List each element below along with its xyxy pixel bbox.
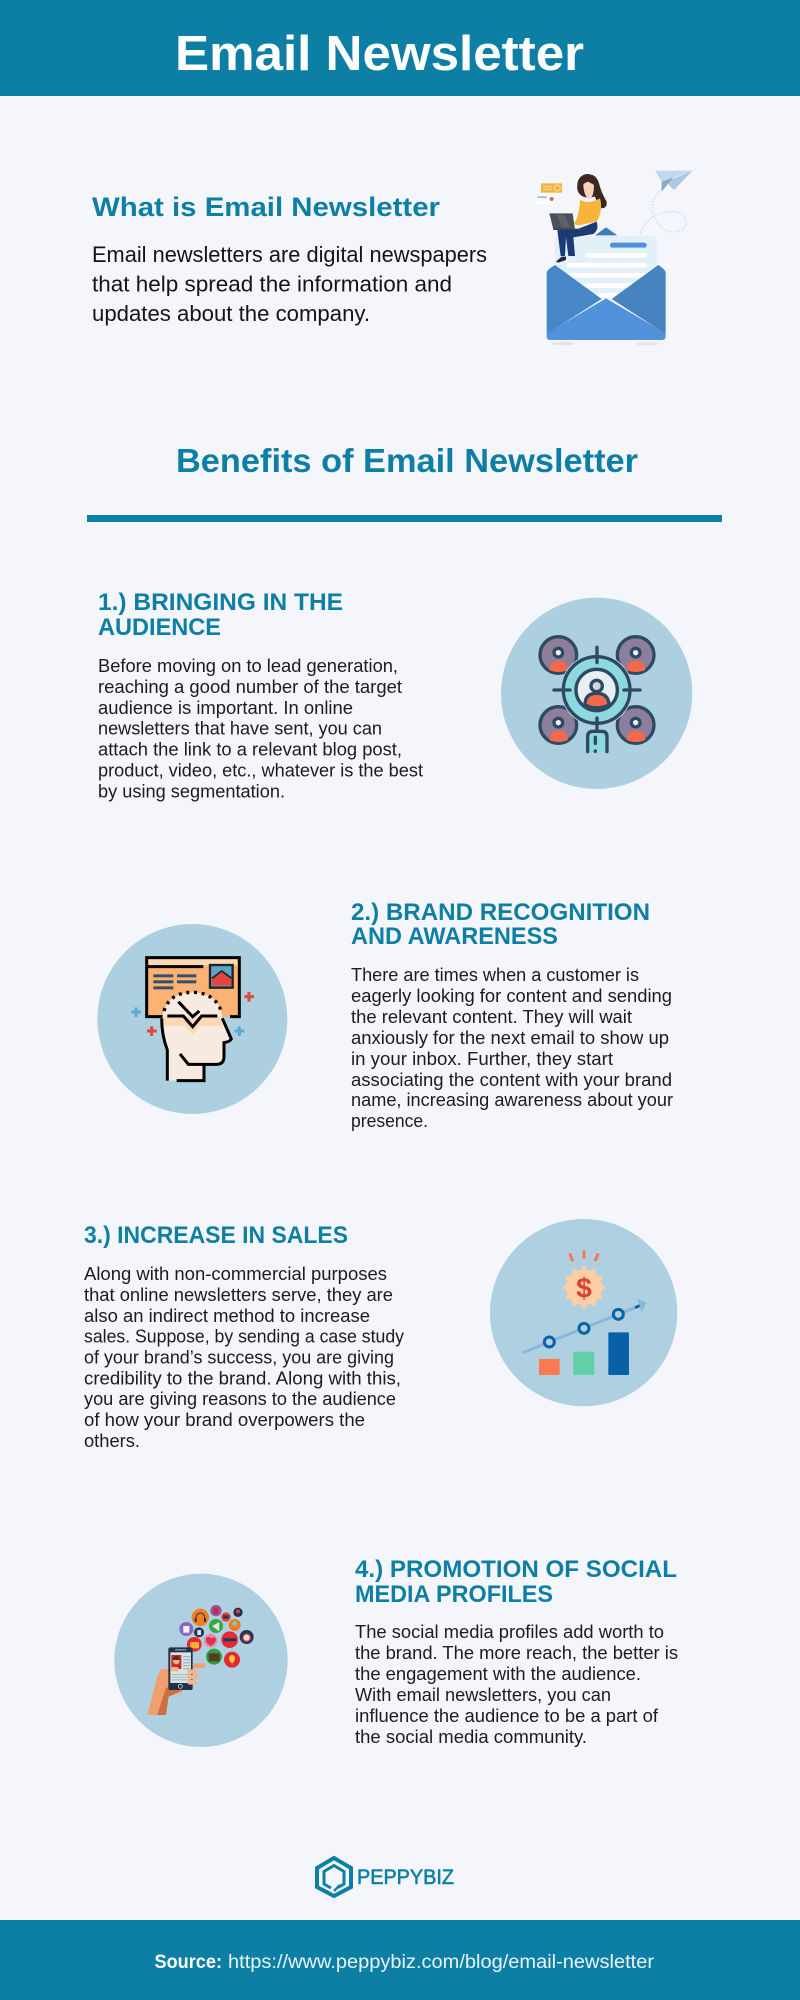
benefit 4 text: The social media profiles add worth to bbox=[355, 1621, 664, 1642]
benefit 1 heading: 1.) BRINGING IN THE bbox=[98, 589, 343, 616]
benefit 1 text: attach the link to a relevant blog post, bbox=[98, 738, 402, 760]
benefit 2 text: associating the content with your brand bbox=[351, 1069, 672, 1090]
benefit 4 text: the social media community. bbox=[355, 1726, 587, 1747]
benefit 4 heading: 4.) PROMOTION OF SOCIAL bbox=[355, 1556, 677, 1583]
benefit 1 text bbox=[98, 655, 424, 802]
title: Email Newsletter bbox=[175, 27, 584, 81]
icon: phone with social media bubbles bbox=[114, 1574, 288, 1747]
benefit 2 text: presence. bbox=[351, 1110, 428, 1131]
benefit 2 text: anxiously for the next email to show up bbox=[351, 1027, 669, 1048]
benefit 1 text: by using segmentation. bbox=[98, 780, 285, 802]
benefit 4 text bbox=[355, 1621, 678, 1747]
intro paragraph bbox=[92, 242, 487, 326]
benefit 2 text: the relevant content. They will wait bbox=[351, 1006, 633, 1027]
benefit 1 heading: AUDIENCE bbox=[98, 614, 221, 641]
benefit 4 text: influence the audience to be a part of bbox=[355, 1705, 659, 1726]
benefit 3 heading: 3.) INCREASE IN SALES bbox=[84, 1222, 348, 1249]
intro heading: What is Email Newsletter bbox=[92, 192, 441, 222]
panel: benefit 4 bbox=[355, 1556, 678, 1747]
benefit 1 text: product, video, etc., whatever is the best bbox=[98, 760, 424, 780]
benefit 4 heading bbox=[355, 1556, 677, 1608]
benefit 2 heading bbox=[351, 899, 650, 950]
benefit 3 text: sales. Suppose, by sending a case study bbox=[84, 1326, 405, 1346]
panel: benefit 1 bbox=[98, 589, 424, 802]
benefit 3 text: that online newsletters serve, they are bbox=[84, 1284, 393, 1305]
header banner with title bbox=[0, 0, 800, 96]
intro paragraph: Email newsletters are digital newspapers bbox=[92, 242, 487, 267]
logo hexagon mark bbox=[317, 1858, 351, 1896]
footer bar with source bbox=[0, 1920, 800, 2000]
logo wordmark: PEPPYBIZ bbox=[357, 1866, 454, 1889]
benefit 3 text: others. bbox=[84, 1430, 140, 1451]
benefit 3 text: of how your brand overpowers the bbox=[84, 1409, 365, 1430]
benefit 4 text: the engagement with the audience. bbox=[355, 1663, 641, 1684]
benefit 1 heading bbox=[98, 589, 343, 641]
panel: what is email newsletter bbox=[92, 192, 487, 326]
benefit 2 text: name, increasing awareness about your bbox=[351, 1089, 673, 1110]
benefit 3 text: Along with non-commercial purposes bbox=[84, 1263, 387, 1284]
benefit 2 text: in your inbox. Further, they start bbox=[351, 1048, 614, 1069]
illustration: woman with laptop sitting on open envelope bbox=[536, 171, 693, 345]
icon: sales growth chart bbox=[490, 1219, 677, 1406]
panel: benefit 3 bbox=[84, 1222, 405, 1451]
benefit 4 heading: MEDIA PROFILES bbox=[355, 1581, 553, 1608]
benefit 4 text: With email newsletters, you can bbox=[355, 1684, 611, 1705]
intro paragraph: updates about the company. bbox=[92, 301, 370, 326]
benefit 2 text: eagerly looking for content and sending bbox=[351, 985, 672, 1006]
benefit 1 text: audience is important. In online bbox=[98, 697, 353, 718]
benefit 3 text: credibility to the brand. Along with this, bbox=[84, 1368, 401, 1388]
panel: benefit 2 bbox=[351, 899, 673, 1131]
section heading: benefits: Benefits of Email Newsletter bbox=[176, 442, 638, 479]
benefit 2 heading: AND AWARENESS bbox=[351, 923, 558, 950]
benefit 2 heading: 2.) BRAND RECOGNITION bbox=[351, 899, 650, 926]
benefit 3 text: also an indirect method to increase bbox=[84, 1305, 370, 1326]
benefit 2 text: There are times when a customer is bbox=[351, 964, 639, 985]
logo: PeppyBiz bbox=[317, 1858, 454, 1896]
icon: sales growth chart: $ bbox=[576, 1272, 592, 1303]
benefit 2 text bbox=[351, 964, 673, 1131]
benefit 3 text: you are giving reasons to the audience bbox=[84, 1388, 396, 1409]
icon: audience target bbox=[501, 598, 692, 789]
benefit 3 text: of your brand’s success, you are giving bbox=[84, 1346, 394, 1368]
benefit 3 text bbox=[84, 1263, 405, 1451]
source url: https://www.peppybiz.com/blog/email-newsletter bbox=[228, 1952, 655, 1973]
benefit 1 text: Before moving on to lead generation, bbox=[98, 655, 398, 676]
intro paragraph: that help spread the information and bbox=[92, 272, 452, 296]
benefit 1 text: reaching a good number of the target bbox=[98, 676, 403, 697]
benefit 4 text: the brand. The more reach, the better is bbox=[355, 1642, 678, 1663]
icon: brand recall head bbox=[97, 924, 287, 1114]
source label: Source: bbox=[154, 1952, 222, 1973]
benefit 1 text: newsletters that have sent, you can bbox=[98, 718, 382, 738]
